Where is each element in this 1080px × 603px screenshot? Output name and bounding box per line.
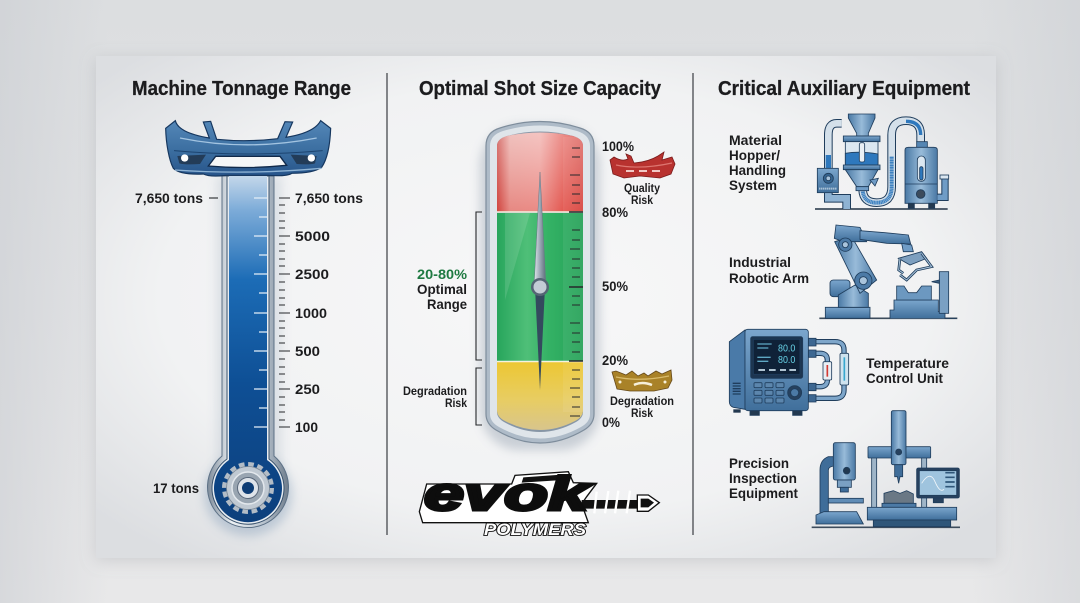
- tonnage labels: 500: [295, 343, 320, 359]
- precision inspection equipment label: [729, 455, 798, 501]
- tonnage labels: 5000: [295, 228, 330, 244]
- heading: machine tonnage range: Machine Tonnage Range: [132, 78, 351, 100]
- icon: gear: [225, 465, 271, 511]
- quality risk label: Risk: [631, 195, 654, 207]
- percentage labels: 0%: [602, 414, 620, 430]
- display readouts: 80.0: [778, 343, 796, 354]
- optimal range label: 20-80%: [417, 266, 468, 282]
- degradation risk bracket: [476, 368, 482, 425]
- heading: optimal shot size capacity: Optimal Shot Size Capacity: [419, 78, 662, 100]
- panel: critical auxiliary equipment: [718, 78, 970, 527]
- gauge scale ticks: [569, 148, 583, 416]
- degradation risk label right: Degradation: [610, 396, 674, 408]
- icon: warped gold bumper: [612, 370, 672, 391]
- precision inspection equipment label: Equipment: [729, 485, 798, 501]
- material hopper label: Handling: [729, 162, 786, 178]
- temperature control unit label: Control Unit: [866, 370, 943, 386]
- optimal range label: Optimal: [417, 281, 467, 297]
- percentage labels: 50%: [602, 278, 629, 294]
- panel: optimal shot size capacity: [403, 78, 675, 539]
- temperature control unit label: [866, 355, 949, 386]
- material hopper label: System: [729, 177, 777, 193]
- industrial robotic arm label: [729, 254, 809, 286]
- red zone: [497, 132, 583, 212]
- tonnage labels: 1000: [295, 305, 327, 321]
- material hopper label: [729, 132, 786, 193]
- temperature control unit label: Temperature: [866, 355, 949, 371]
- degradation risk label right: Risk: [631, 408, 654, 420]
- optimal range label: [417, 266, 468, 312]
- industrial robotic arm label: Robotic Arm: [729, 270, 809, 286]
- inner white scale ticks: [254, 198, 267, 427]
- tonnage labels: 17 tons: [153, 480, 199, 496]
- outer tonnage ticks: [209, 198, 290, 427]
- icon: material hopper system: [815, 114, 949, 209]
- green zone: [497, 213, 583, 361]
- logo: evok polymers: evok: [424, 467, 592, 520]
- panel: machine tonnage range: [132, 78, 363, 536]
- percentage labels: 100%: [602, 138, 634, 154]
- percentage labels: [602, 138, 634, 430]
- precision inspection equipment label: Precision: [729, 455, 789, 471]
- icon: warped red bumper: [610, 152, 675, 178]
- main white panel: [96, 56, 996, 558]
- icon: temperature control unit: [729, 329, 849, 415]
- tonnage labels: 7,650 tons: [295, 190, 363, 206]
- heading: critical auxiliary equipment: Critical Auxiliary Equipment: [718, 78, 970, 100]
- quality risk label: Quality: [624, 183, 661, 195]
- tonnage labels: [135, 190, 363, 496]
- precision inspection equipment label: Inspection: [729, 470, 797, 486]
- quality risk label: [624, 183, 661, 207]
- shot size gauge: [480, 122, 600, 450]
- tonnage labels: 100: [295, 419, 318, 435]
- tonnage labels: 2500: [295, 266, 329, 282]
- degradation risk label left: Risk: [445, 398, 468, 410]
- column dividers: [387, 73, 693, 535]
- degradation risk label right: [610, 396, 674, 420]
- material hopper label: Hopper/: [729, 147, 780, 163]
- icon: robotic arm: [819, 225, 957, 318]
- degradation risk label left: [403, 386, 468, 410]
- yellow zone: [497, 362, 583, 430]
- logo: evok polymers: [419, 467, 659, 539]
- optimal range bracket: [476, 212, 482, 360]
- icon: blue car bumper: [166, 121, 331, 176]
- thermometer gauge: [204, 176, 292, 536]
- industrial robotic arm label: Industrial: [729, 254, 791, 270]
- icon: temperature control unit: 80.0: [778, 355, 796, 366]
- percentage labels: 80%: [602, 204, 629, 220]
- percentage labels: 20%: [602, 352, 629, 368]
- degradation risk label left: Degradation: [403, 386, 467, 398]
- material hopper label: Material: [729, 132, 782, 148]
- optimal range label: Range: [427, 296, 467, 312]
- logo: evok polymers: POLYMERS: [484, 520, 587, 539]
- tonnage labels: 250: [295, 381, 320, 397]
- icon: inspection equipment: [812, 411, 960, 527]
- tonnage labels: 7,650 tons: [135, 190, 203, 206]
- gauge needle: [531, 172, 549, 390]
